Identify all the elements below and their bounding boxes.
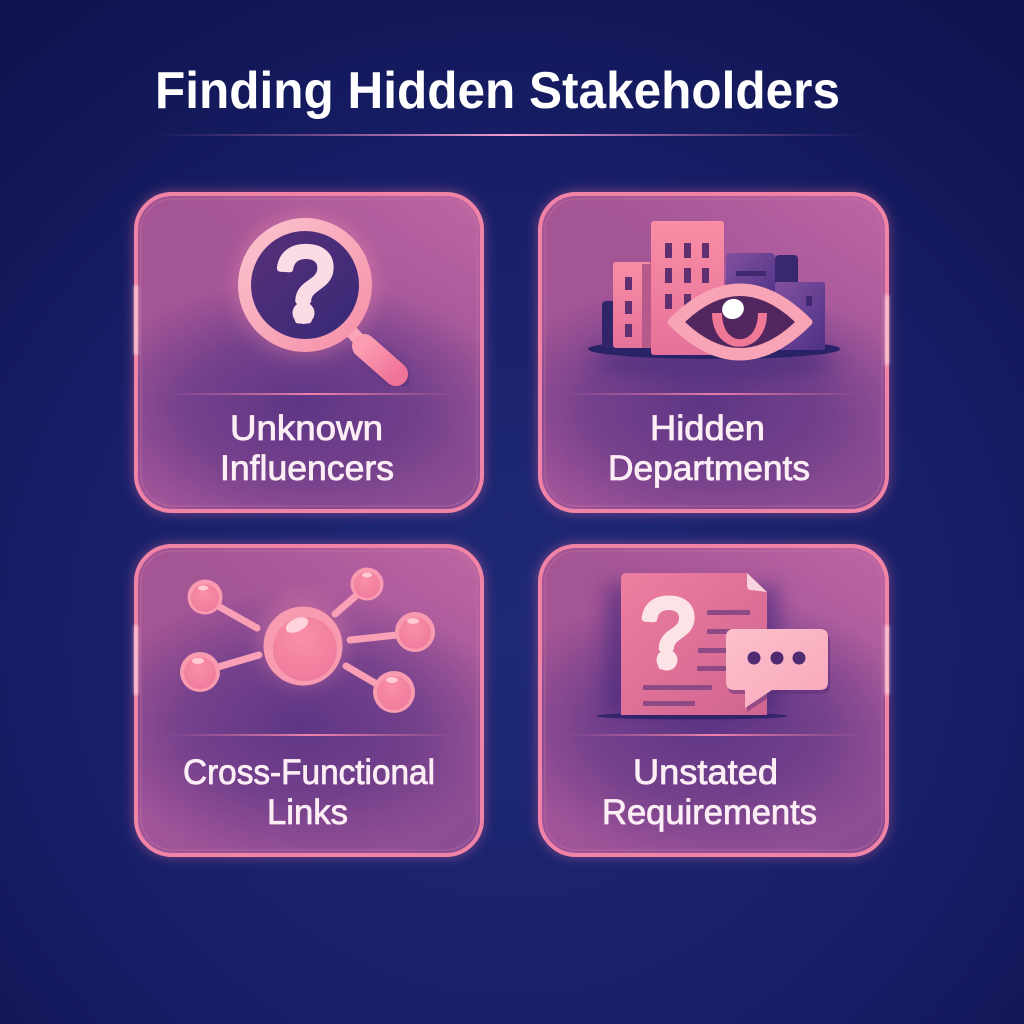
panel: unknown influencers [126,184,492,521]
label: hidden departments [608,409,810,488]
icon: document with question mark and speech bubble [596,573,830,720]
panel: cross-functional links [126,536,492,865]
panel: unstated requirements [530,536,897,865]
panel: hidden departments [530,184,897,521]
label: hidden departments: Hidden [650,409,765,448]
icon: network of connected nodes [180,568,435,713]
label: cross-functional links [183,753,435,832]
icon: magnifying glass with question mark [233,213,400,378]
label: unstated requirements: Unstated [633,753,778,792]
title: Finding Hidden Stakeholders [155,62,840,120]
label: unknown influencers [220,409,394,488]
label: unstated requirements [602,753,817,832]
label: unknown influencers: Influencers [220,449,394,488]
label: hidden departments: Departments [608,449,810,488]
label: unstated requirements: Requirements [602,793,817,832]
label: cross-functional links: Cross-Functional [183,753,435,792]
icon: document with question mark and speech bubble: ? [641,580,695,687]
label: cross-functional links: Links [267,793,348,832]
label: unknown influencers: Unknown [230,409,383,448]
icon: magnifying glass with question mark: ? [276,227,334,343]
icon: buildings with eye [588,221,840,382]
